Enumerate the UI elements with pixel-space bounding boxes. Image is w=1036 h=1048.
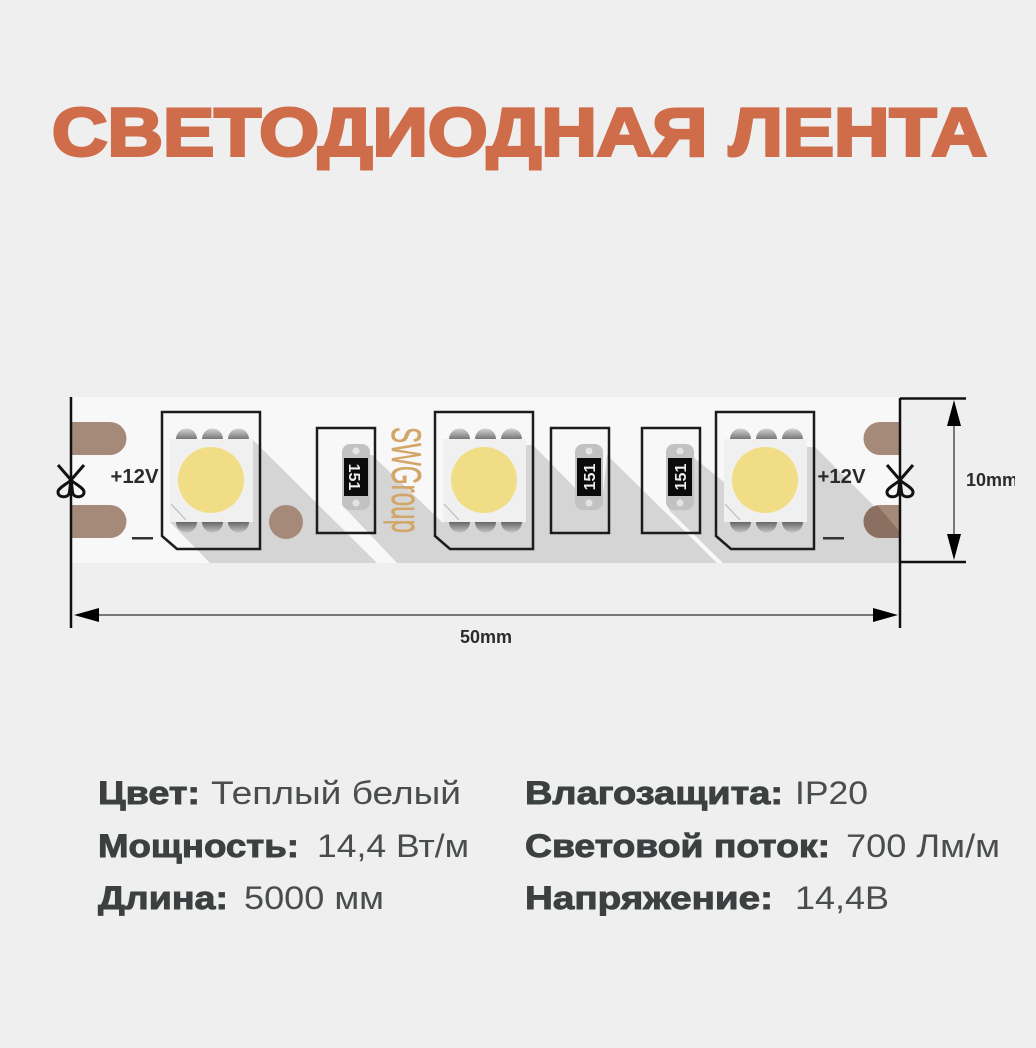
spec: color bbox=[98, 775, 461, 811]
LED 1 bbox=[162, 412, 260, 549]
specifications bbox=[98, 775, 1000, 916]
LED 2 bbox=[435, 412, 533, 549]
label: left minus bbox=[132, 537, 153, 540]
resistor 1: 151 bbox=[345, 464, 362, 490]
spec: color: Цвет: bbox=[98, 775, 200, 811]
title: СВЕТОДИОДНАЯ ЛЕНТА bbox=[52, 94, 987, 170]
diagram: LED strip bbox=[58, 397, 1018, 647]
spec: moisture protection: IP20 bbox=[795, 775, 868, 811]
spec: length: 5000 мм bbox=[244, 880, 384, 916]
spec: power: Мощность: bbox=[98, 828, 299, 864]
spec: power bbox=[98, 828, 469, 864]
spec: length: Длина: bbox=[98, 880, 228, 916]
resistor 3: 151 bbox=[673, 464, 690, 490]
resistor 3 bbox=[642, 428, 700, 533]
strip background bbox=[71, 397, 900, 563]
spec: voltage bbox=[525, 880, 889, 916]
spec: power: 14,4 Вт/м bbox=[317, 828, 469, 864]
contact pads bbox=[71, 422, 900, 539]
dimension: width 50mm: 50mm bbox=[460, 627, 512, 647]
dimension: height 10mm bbox=[900, 398, 1018, 562]
label: left +12V: +12V bbox=[110, 466, 159, 488]
spec: luminous flux: Световой поток: bbox=[525, 828, 830, 864]
resistor 1 bbox=[317, 428, 375, 533]
shaded pad overlap bbox=[864, 505, 900, 538]
LED 3 bbox=[716, 412, 814, 549]
dimension: width 50mm bbox=[71, 397, 900, 647]
brand label: SWGroup bbox=[383, 427, 430, 533]
dimension: height 10mm: 10mm bbox=[966, 470, 1018, 490]
spec: voltage: Напряжение: bbox=[525, 880, 773, 916]
spec: moisture protection: Влагозащита: bbox=[525, 775, 783, 811]
spec: luminous flux bbox=[525, 828, 1000, 864]
diagonal shadows bbox=[170, 440, 900, 563]
icon: scissors right bbox=[887, 465, 913, 497]
spec: color: Теплый белый bbox=[211, 775, 461, 811]
spec: moisture protection bbox=[525, 775, 868, 811]
resistor 2: 151 bbox=[582, 464, 599, 490]
spec: length bbox=[98, 880, 384, 916]
resistor 2 bbox=[551, 428, 609, 533]
icon: scissors left bbox=[58, 465, 84, 497]
spec: luminous flux: 700 Лм/м bbox=[846, 828, 1000, 864]
label: right minus bbox=[823, 537, 844, 540]
label: right +12V: +12V bbox=[818, 466, 866, 488]
spec: voltage: 14,4В bbox=[795, 880, 889, 916]
